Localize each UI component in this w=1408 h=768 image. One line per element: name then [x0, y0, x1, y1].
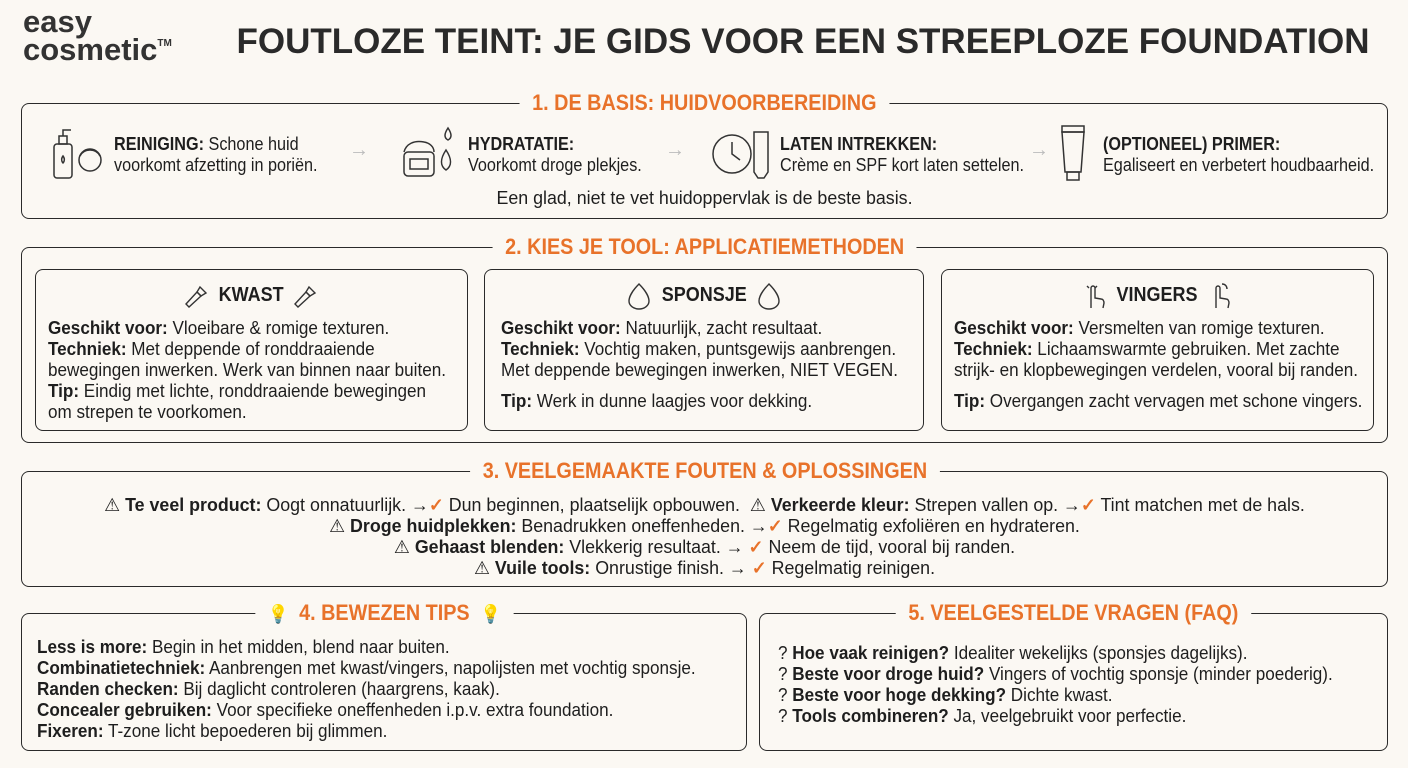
heading 1: 1. DE BASIS: HUIDVOORBEREIDING: [532, 90, 877, 115]
card title vingers: VINGERS: [1117, 284, 1198, 306]
tips list: [37, 637, 696, 741]
panel: fouten: [21, 471, 1388, 587]
logo: [23, 4, 172, 67]
tips list: Randen checken: Bij daglicht controleren (haargrens, kaak).: [37, 679, 500, 699]
text: hydratatie: Voorkomt droge plekjes.: [468, 155, 642, 175]
card text kwast: [48, 318, 446, 422]
text: primer: [1103, 134, 1374, 175]
mistakes list: [104, 495, 1305, 578]
card text sponsje: Met deppende bewegingen inwerken, NIET VEGEN. Tip: Werk in dunne laagjes voor dekking.: [501, 360, 898, 411]
text: hydratatie: HYDRATATIE:: [468, 134, 574, 154]
mistakes list: ⚠ Vuile tools: Onrustige finish. → ✓ Regelmatig reinigen.: [474, 558, 935, 578]
panel: basis: [21, 103, 1388, 219]
tips list: Concealer gebruiken: Voor specifieke oneffenheden i.p.v. extra foundation.: [37, 700, 613, 720]
text: reiniging: REINIGING: Schone huid: [114, 134, 299, 154]
heading 5: 5. VEELGESTELDE VRAGEN (FAQ): [908, 600, 1239, 625]
panel: faq: [759, 613, 1388, 751]
card text vingers: Geschikt voor: Versmelten van romige texturen.: [954, 318, 1325, 338]
card text vingers: Techniek: Lichaamswarmte gebruiken. Met zachte: [954, 339, 1340, 359]
heading 3: 3. VEELGEMAAKTE FOUTEN & OPLOSSINGEN: [482, 458, 927, 483]
arrow: →: [349, 139, 369, 161]
text: reiniging: voorkomt afzetting in poriën.: [114, 155, 318, 175]
card: sponsje: [484, 269, 924, 431]
card text vingers: strijk- en klopbewegingen verdelen, vooral bij randen. Tip: Overgangen zacht vervagen met schone vingers.: [954, 360, 1362, 411]
panel: tools: [21, 247, 1388, 443]
card: vingers: [941, 269, 1374, 431]
card text vingers: [954, 318, 1362, 411]
text: laten intrekken: Crème en SPF kort laten settelen.: [780, 155, 1024, 175]
mistakes list: ⚠ Gehaast blenden: Vlekkerig resultaat. → ✓ Neem de tijd, vooral bij randen.: [394, 537, 1015, 557]
card text kwast: Techniek: Met deppende of ronddraaiende: [48, 339, 375, 359]
card title sponsje: [628, 283, 780, 310]
text: laten intrekken: [780, 134, 1024, 175]
card title kwast: KWAST: [219, 284, 284, 306]
footer text: Een glad, niet te vet huidoppervlak is de beste basis.: [496, 188, 913, 208]
tips list: Less is more: Begin in het midden, blend naar buiten.: [37, 637, 450, 657]
card title sponsje: SPONSJE: [661, 284, 747, 306]
logo: cosmeticTM: [23, 32, 172, 67]
heading 4: 💡 4. BEWEZEN TIPS 💡: [268, 600, 500, 625]
faq list: ? Beste voor hoge dekking? Dichte kwast.: [778, 685, 1113, 705]
mistakes list: ⚠ Droge huidplekken: Benadrukken oneffenheden. →✓ Regelmatig exfoliëren en hydrateren.: [329, 516, 1080, 536]
text: hydratatie: [468, 134, 642, 175]
card title vingers: [1086, 283, 1230, 308]
card title kwast: [185, 284, 316, 308]
card text kwast: Tip: Eindig met lichte, ronddraaiende bewegingen: [48, 381, 426, 401]
faq list: ? Beste voor droge huid? Vingers of vochtig sponsje (minder poederig).: [778, 664, 1333, 684]
text: primer: (OPTIONEEL) PRIMER:: [1103, 134, 1280, 154]
icon: cleanser: [53, 129, 102, 179]
panel: tips: [21, 613, 747, 751]
text: reiniging: [114, 134, 318, 175]
text: laten intrekken: LATEN INTREKKEN:: [780, 134, 937, 154]
card: kwast: [35, 269, 468, 431]
logo: easy: [23, 4, 92, 39]
card text sponsje: Geschikt voor: Natuurlijk, zacht resultaat.: [501, 318, 822, 338]
faq list: ? Hoe vaak reinigen? Idealiter wekelijks (sponsjes dagelijks).: [778, 643, 1248, 663]
title: FOUTLOZE TEINT: JE GIDS VOOR EEN STREEPLOZE FOUNDATION: [236, 22, 1370, 61]
icon: cream jar: [403, 126, 452, 177]
text: primer: Egaliseert en verbetert houdbaarheid.: [1103, 155, 1374, 175]
faq list: ? Tools combineren? Ja, veelgebruikt voor perfectie.: [778, 706, 1186, 726]
arrow: →: [1029, 139, 1049, 161]
card text kwast: Geschikt voor: Vloeibare & romige texturen.: [48, 318, 389, 338]
icon: primer tube: [1061, 125, 1085, 181]
card text kwast: bewegingen inwerken. Werk van binnen naar buiten.: [48, 360, 446, 380]
icon: clock tube: [712, 131, 769, 179]
mistakes list: ⚠ Te veel product: Oogt onnatuurlijk. →✓ Dun beginnen, plaatselijk opbouwen. ⚠ Verkeerde kleur: Strepen vallen op. →✓ Tint matchen met de hals.: [104, 495, 1305, 515]
card text sponsje: [501, 318, 898, 411]
tips list: Fixeren: T-zone licht bepoederen bij glimmen.: [37, 721, 387, 741]
faq list: [778, 643, 1333, 726]
card text sponsje: Techniek: Vochtig maken, puntsgewijs aanbrengen.: [501, 339, 896, 359]
tips list: Combinatietechniek: Aanbrengen met kwast/vingers, napolijsten met vochtig sponsje.: [37, 658, 696, 678]
heading 2: 2. KIES JE TOOL: APPLICATIEMETHODEN: [505, 234, 904, 259]
card text kwast: om strepen te voorkomen.: [48, 402, 247, 422]
arrow: →: [665, 139, 685, 161]
